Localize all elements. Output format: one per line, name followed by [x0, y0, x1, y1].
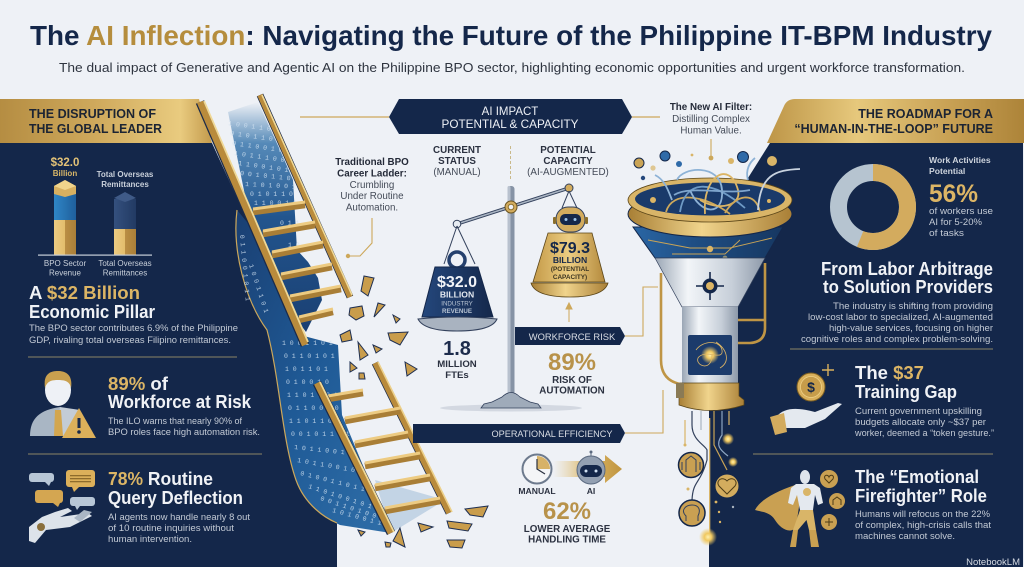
stat: economic pillar: Economic Pillar [29, 301, 155, 322]
data ribbon: binary stream behind ladder: 0 0 1 1 0 1 0 0 1 [319, 495, 385, 522]
icon: AI filter funnel [628, 151, 800, 410]
callout: career ladder: Automation. [346, 202, 398, 214]
stat: routine query deflection: human intervention. [108, 534, 192, 544]
stat: economic pillar: GDP, rivaling total overseas Filipino remittances. [29, 335, 231, 345]
data ribbon: binary stream behind ladder: 0 1 1 [280, 220, 300, 227]
data ribbon: binary stream behind ladder: 1 0 1 1 0 0 1 0 [294, 444, 353, 457]
stat: economic pillar: The BPO sector contributes 6.9% of the Philippine [29, 323, 238, 333]
text block: labor arbitrage to solution providers [801, 258, 993, 344]
left weight: $32.0 billion: $32.0 [437, 274, 477, 291]
stat: routine query deflection: 78% Routine [108, 468, 213, 489]
icon: robot hand with chat bubbles [29, 470, 95, 543]
callout: career ladder: Traditional BPO [335, 157, 409, 168]
icon: manual clock to AI robot arrow: MANUAL [518, 486, 556, 496]
stat: workforce at risk: BPO roles face high automation risk. [108, 427, 260, 437]
stat: workforce at risk: 89% of [108, 373, 169, 394]
column heading: current status [433, 145, 481, 178]
callout: career ladder: Career Ladder: [337, 168, 407, 180]
data ribbon: binary stream behind ladder: 0 1 0 1 1 0 [250, 191, 293, 198]
left weight: $32.0 billion: INDUSTRY [441, 300, 473, 308]
data ribbon: binary stream behind ladder: 1 0 1 1 1 0 0 [234, 150, 285, 164]
banner: AI impact: AI IMPACT [482, 106, 538, 118]
data ribbon: binary stream behind ladder: 0 1 0 1 1 0 1 [230, 130, 281, 144]
bar chart: BPO revenue vs remittances: Total Overseas [98, 259, 152, 268]
stat: FTE count: 1.8 [443, 338, 471, 360]
text block: labor arbitrage to solution providers: high-value services, focusing on higher [829, 323, 993, 333]
data ribbon: binary stream behind ladder: 0 1 1 0 0 1 0 [232, 140, 283, 154]
header band: right: “HUMAN-IN-THE-LOOP” FUTURE [794, 122, 993, 136]
stat: routine query deflection: AI agents now handle nearly 8 out [108, 512, 251, 522]
icon: worker with warning [30, 371, 96, 438]
stat: risk of automation: AUTOMATION [539, 386, 605, 396]
column heading: current status: (MANUAL) [433, 167, 481, 178]
text block: labor arbitrage to solution providers: to Solution Providers [823, 276, 993, 297]
stat: FTE count: FTEs [445, 370, 469, 381]
data ribbon: binary stream behind ladder: 1 0 0 1 1 0 [228, 120, 271, 133]
banner: operational efficiency [413, 390, 663, 443]
title: The AI Inflection: Navigating the Future of the Philippine IT-BPM Industry [30, 20, 993, 51]
bar chart: BPO revenue vs remittances: Revenue [49, 268, 82, 278]
callout: career ladder [335, 157, 409, 258]
stat: routine query deflection [108, 468, 251, 544]
donut chart: 56 percent [838, 172, 908, 242]
stat: workforce at risk: Workforce at Risk [108, 391, 252, 412]
data ribbon: binary stream behind ladder: 0 1 1 0 1 0 1 [284, 353, 335, 360]
stat: lower handling time [524, 498, 611, 546]
data ribbon: binary stream behind ladder [228, 102, 445, 533]
data ribbon: binary stream behind ladder: 0 1 0 0 1 1 0 1 1 [300, 470, 366, 493]
stat: economic pillar: A $32 Billion [29, 282, 140, 303]
header band: right [767, 99, 1024, 143]
text block: labor arbitrage to solution providers: From Labor Arbitrage [821, 258, 993, 279]
stat: emotional firefighter: Firefighter” Role [855, 485, 987, 506]
stat: FTE count: MILLION [437, 359, 477, 370]
banner: operational efficiency: OPERATIONAL EFFICIENCY [492, 428, 613, 439]
banner: workforce risk [515, 287, 658, 345]
icon: manual clock to AI robot arrow [518, 450, 622, 496]
data ribbon: binary stream behind ladder: 1 1 0 0 1 1 [254, 200, 297, 207]
stat: risk of automation: 89% [548, 349, 596, 376]
right weight: $79.3 billion with robot: $79.3 [550, 240, 590, 257]
column heading: current status: STATUS [438, 156, 476, 167]
bar chart: BPO revenue vs remittances [38, 157, 154, 278]
stat: lower handling time: LOWER AVERAGE [524, 524, 611, 535]
stat: work activities potential: Work Activities [929, 155, 991, 165]
data ribbon: binary stream behind ladder: 0 0 1 0 1 1 0 1 [291, 431, 350, 438]
right weight: $79.3 billion with robot [531, 207, 608, 297]
text block: labor arbitrage to solution providers: low-cost labor to specialized, AI-augmented [808, 312, 993, 322]
stat: emotional firefighter: machines cannot solve. [855, 531, 955, 541]
data ribbon: binary stream behind ladder: 1 1 0 0 1 0 1 [238, 160, 289, 174]
icon: crumbling career ladder, lower section [317, 362, 452, 533]
right weight: $79.3 billion with robot: BILLION [553, 255, 587, 265]
data ribbon: binary stream behind ladder: 1 1 0 1 1 0 1 [289, 418, 340, 425]
left weight: $32.0 billion: BILLION [440, 290, 474, 300]
banner: AI impact [300, 99, 660, 134]
banner: AI impact: POTENTIAL & CAPACITY [442, 119, 579, 131]
callout: career ladder: Under Routine [340, 191, 404, 202]
stat: workforce at risk [108, 373, 260, 437]
bar chart: BPO revenue vs remittances: $32.0 [51, 157, 79, 169]
stat: training gap: worker, deemed a “token gesture.” [854, 428, 994, 438]
data ribbon: binary stream behind ladder: 1 0 1 1 0 0 1 0 1 [297, 457, 363, 476]
header band: left: THE DISRUPTION OF [29, 107, 156, 121]
callout: AI filter [670, 102, 752, 160]
subtitle: The dual impact of Generative and Agentic AI on the Philippine BPO sector, highlighting economic opportunities and urgent workforce transformation. [59, 61, 965, 75]
chart: balance scale [418, 184, 608, 412]
stat: FTE count [437, 338, 477, 381]
header band: left: THE GLOBAL LEADER [29, 122, 162, 136]
bar chart: BPO revenue vs remittances: BPO Sector [44, 259, 86, 268]
data ribbon: binary stream behind ladder: 1 0 1 0 0 1 1 0 [331, 507, 390, 529]
stat: training gap: budgets allocate only ~$37 per [855, 417, 986, 427]
data ribbon: binary stream behind ladder: 0 1 0 0 1 0 [286, 379, 329, 386]
column heading: current status: CURRENT [433, 145, 481, 156]
callout: AI filter: The New AI Filter: [670, 102, 752, 113]
stat: lower handling time: 62% [543, 498, 591, 525]
stat: routine query deflection: Query Deflection [108, 487, 243, 508]
column heading: potential capacity: (AI-AUGMENTED) [527, 167, 609, 178]
icon: coin over open hand [770, 364, 842, 435]
icon: coin over open hand: $ [807, 379, 815, 395]
header band: right: THE ROADMAP FOR A [858, 107, 993, 121]
stat: emotional firefighter: Humans will refocus on the 22% [855, 509, 990, 519]
callout: career ladder: Crumbling [350, 180, 394, 191]
icon: crumbling career ladder, upper section [200, 95, 352, 345]
data ribbon: binary stream behind ladder: 1 0 0 1 1 0 1 [247, 263, 269, 314]
stat: lower handling time: HANDLING TIME [528, 534, 606, 546]
column heading: potential capacity: CAPACITY [543, 156, 593, 167]
stat: risk of automation [539, 349, 605, 396]
text block: labor arbitrage to solution providers: The industry is shifting from providing [833, 301, 993, 311]
stat: emotional firefighter: The “Emotional [855, 466, 979, 487]
column heading: potential capacity: POTENTIAL [540, 145, 596, 156]
data ribbon: binary stream behind ladder: 1 1 0 1 0 0 1 0 1 [307, 483, 373, 510]
stat: workforce at risk: The ILO warns that nearly 90% of [108, 416, 242, 426]
stat: training gap: Training Gap [855, 381, 957, 402]
stat: training gap: The $37 [855, 362, 924, 383]
data ribbon: binary stream behind ladder: 1 1 0 1 0 0 1 [245, 181, 296, 191]
left weight: $32.0 billion [418, 252, 497, 331]
data ribbon: binary stream behind ladder: 1 1 0 1 1 0 1 [287, 392, 338, 399]
bar chart: BPO revenue vs remittances: Remittances [103, 268, 147, 278]
stat: routine query deflection: of 10 routine inquiries without [108, 523, 235, 533]
data ribbon: binary stream behind ladder: 1 0 1 1 0 1 [285, 366, 328, 373]
stat: risk of automation: RISK OF [552, 375, 592, 386]
stat: emotional firefighter: of complex, high-crisis calls that [855, 520, 992, 530]
stat: economic pillar [29, 282, 238, 345]
stat: work activities potential: of tasks [929, 228, 965, 238]
data ribbon: binary stream behind ladder: 1 0 [288, 242, 300, 249]
bar chart: BPO revenue vs remittances: Remittances [101, 180, 149, 189]
stat: work activities potential: AI for 5-20% [929, 217, 982, 227]
data ribbon: binary stream behind ladder: 0 1 1 0 0 1 0 1 1 [238, 235, 251, 301]
left weight: $32.0 billion: REVENUE [442, 308, 472, 315]
arrow: up to gold weight [566, 303, 572, 322]
stat: work activities potential: 56% [929, 180, 978, 208]
icon: falling ladder debris [340, 276, 488, 548]
data ribbon: binary stream behind ladder: 0 0 1 0 1 1 0 [240, 170, 291, 182]
stat: emotional firefighter [855, 466, 992, 541]
stat: work activities potential: of workers use [929, 206, 993, 216]
callout: AI filter: Distilling Complex [672, 114, 750, 125]
stat: training gap: Current government upskilling [855, 406, 982, 416]
bar chart: BPO revenue vs remittances: Billion [53, 169, 77, 178]
icon: emotional firefighter hero [755, 470, 845, 547]
stat: work activities potential: Potential [929, 166, 965, 176]
panel: right roadmap background [709, 143, 1023, 567]
data ribbon: binary stream behind ladder: 1 0 0 1 1 0 1 [282, 340, 333, 347]
right weight: $79.3 billion with robot: (POTENTIAL [551, 266, 589, 273]
data ribbon: binary stream behind ladder: 0 1 1 0 0 1 0 [288, 405, 339, 412]
icon: distilled value outputs [678, 411, 739, 546]
banner: workforce risk: WORKFORCE RISK [529, 331, 616, 342]
icon: manual clock to AI robot arrow: AI [587, 486, 595, 496]
text block: labor arbitrage to solution providers: cognitive roles and complex problem-solving. [801, 334, 993, 344]
header band: left [0, 99, 212, 143]
right weight: $79.3 billion with robot: CAPACITY) [553, 274, 587, 281]
stat: training gap [854, 362, 994, 438]
bar chart: BPO revenue vs remittances: Total Overseas [97, 170, 154, 179]
column heading: potential capacity [527, 145, 609, 178]
callout: AI filter: Human Value. [680, 126, 742, 136]
panel: left disruption background [0, 143, 337, 567]
stat: work activities potential [929, 155, 993, 238]
